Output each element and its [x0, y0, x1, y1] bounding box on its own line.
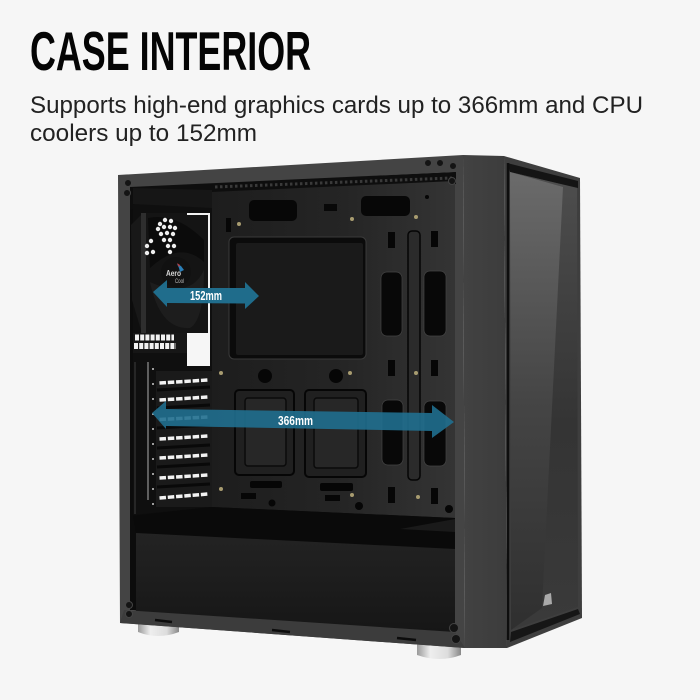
panel: PSU shroud [133, 507, 455, 633]
arrow: 366mm graphics card clearance [152, 401, 454, 438]
drive mounts [235, 390, 366, 477]
CPU cutout [229, 237, 366, 359]
expansion slots [135, 362, 212, 514]
label: 366mm: 366mm [278, 413, 313, 428]
fan logo: Aero [166, 268, 181, 278]
panel: motherboard tray [212, 181, 455, 518]
title: CASE INTERIOR [30, 20, 311, 82]
subtitle text [30, 92, 643, 147]
vertical rail [408, 231, 420, 480]
small holes and standoffs [226, 195, 453, 513]
panel: case side and glass front [463, 155, 582, 648]
subtitle text: coolers up to 152mm [30, 120, 257, 147]
icon: case feet [138, 624, 461, 659]
icon: corner thumbscrews [124, 160, 460, 644]
label: 152mm: 152mm [190, 288, 222, 303]
panel: interior opening [130, 172, 455, 633]
subtitle text: Supports high-end graphics cards up to 366mm and CPU [30, 92, 643, 119]
white cutout [187, 333, 210, 366]
cable routing slots [381, 271, 446, 466]
panel: bottom frame [120, 610, 465, 648]
top cable cutouts [249, 200, 297, 221]
panel: rear wall [131, 188, 212, 515]
icon: rear fan [131, 213, 210, 333]
icon: front logo [543, 593, 552, 606]
icon: rear fan: Cool [175, 279, 184, 285]
panel: top vent [130, 172, 456, 210]
panel: front frame [118, 155, 465, 648]
arrow: 152mm CPU cooler clearance [153, 280, 259, 309]
PC case illustration [118, 155, 582, 659]
perforated plate [133, 333, 187, 353]
